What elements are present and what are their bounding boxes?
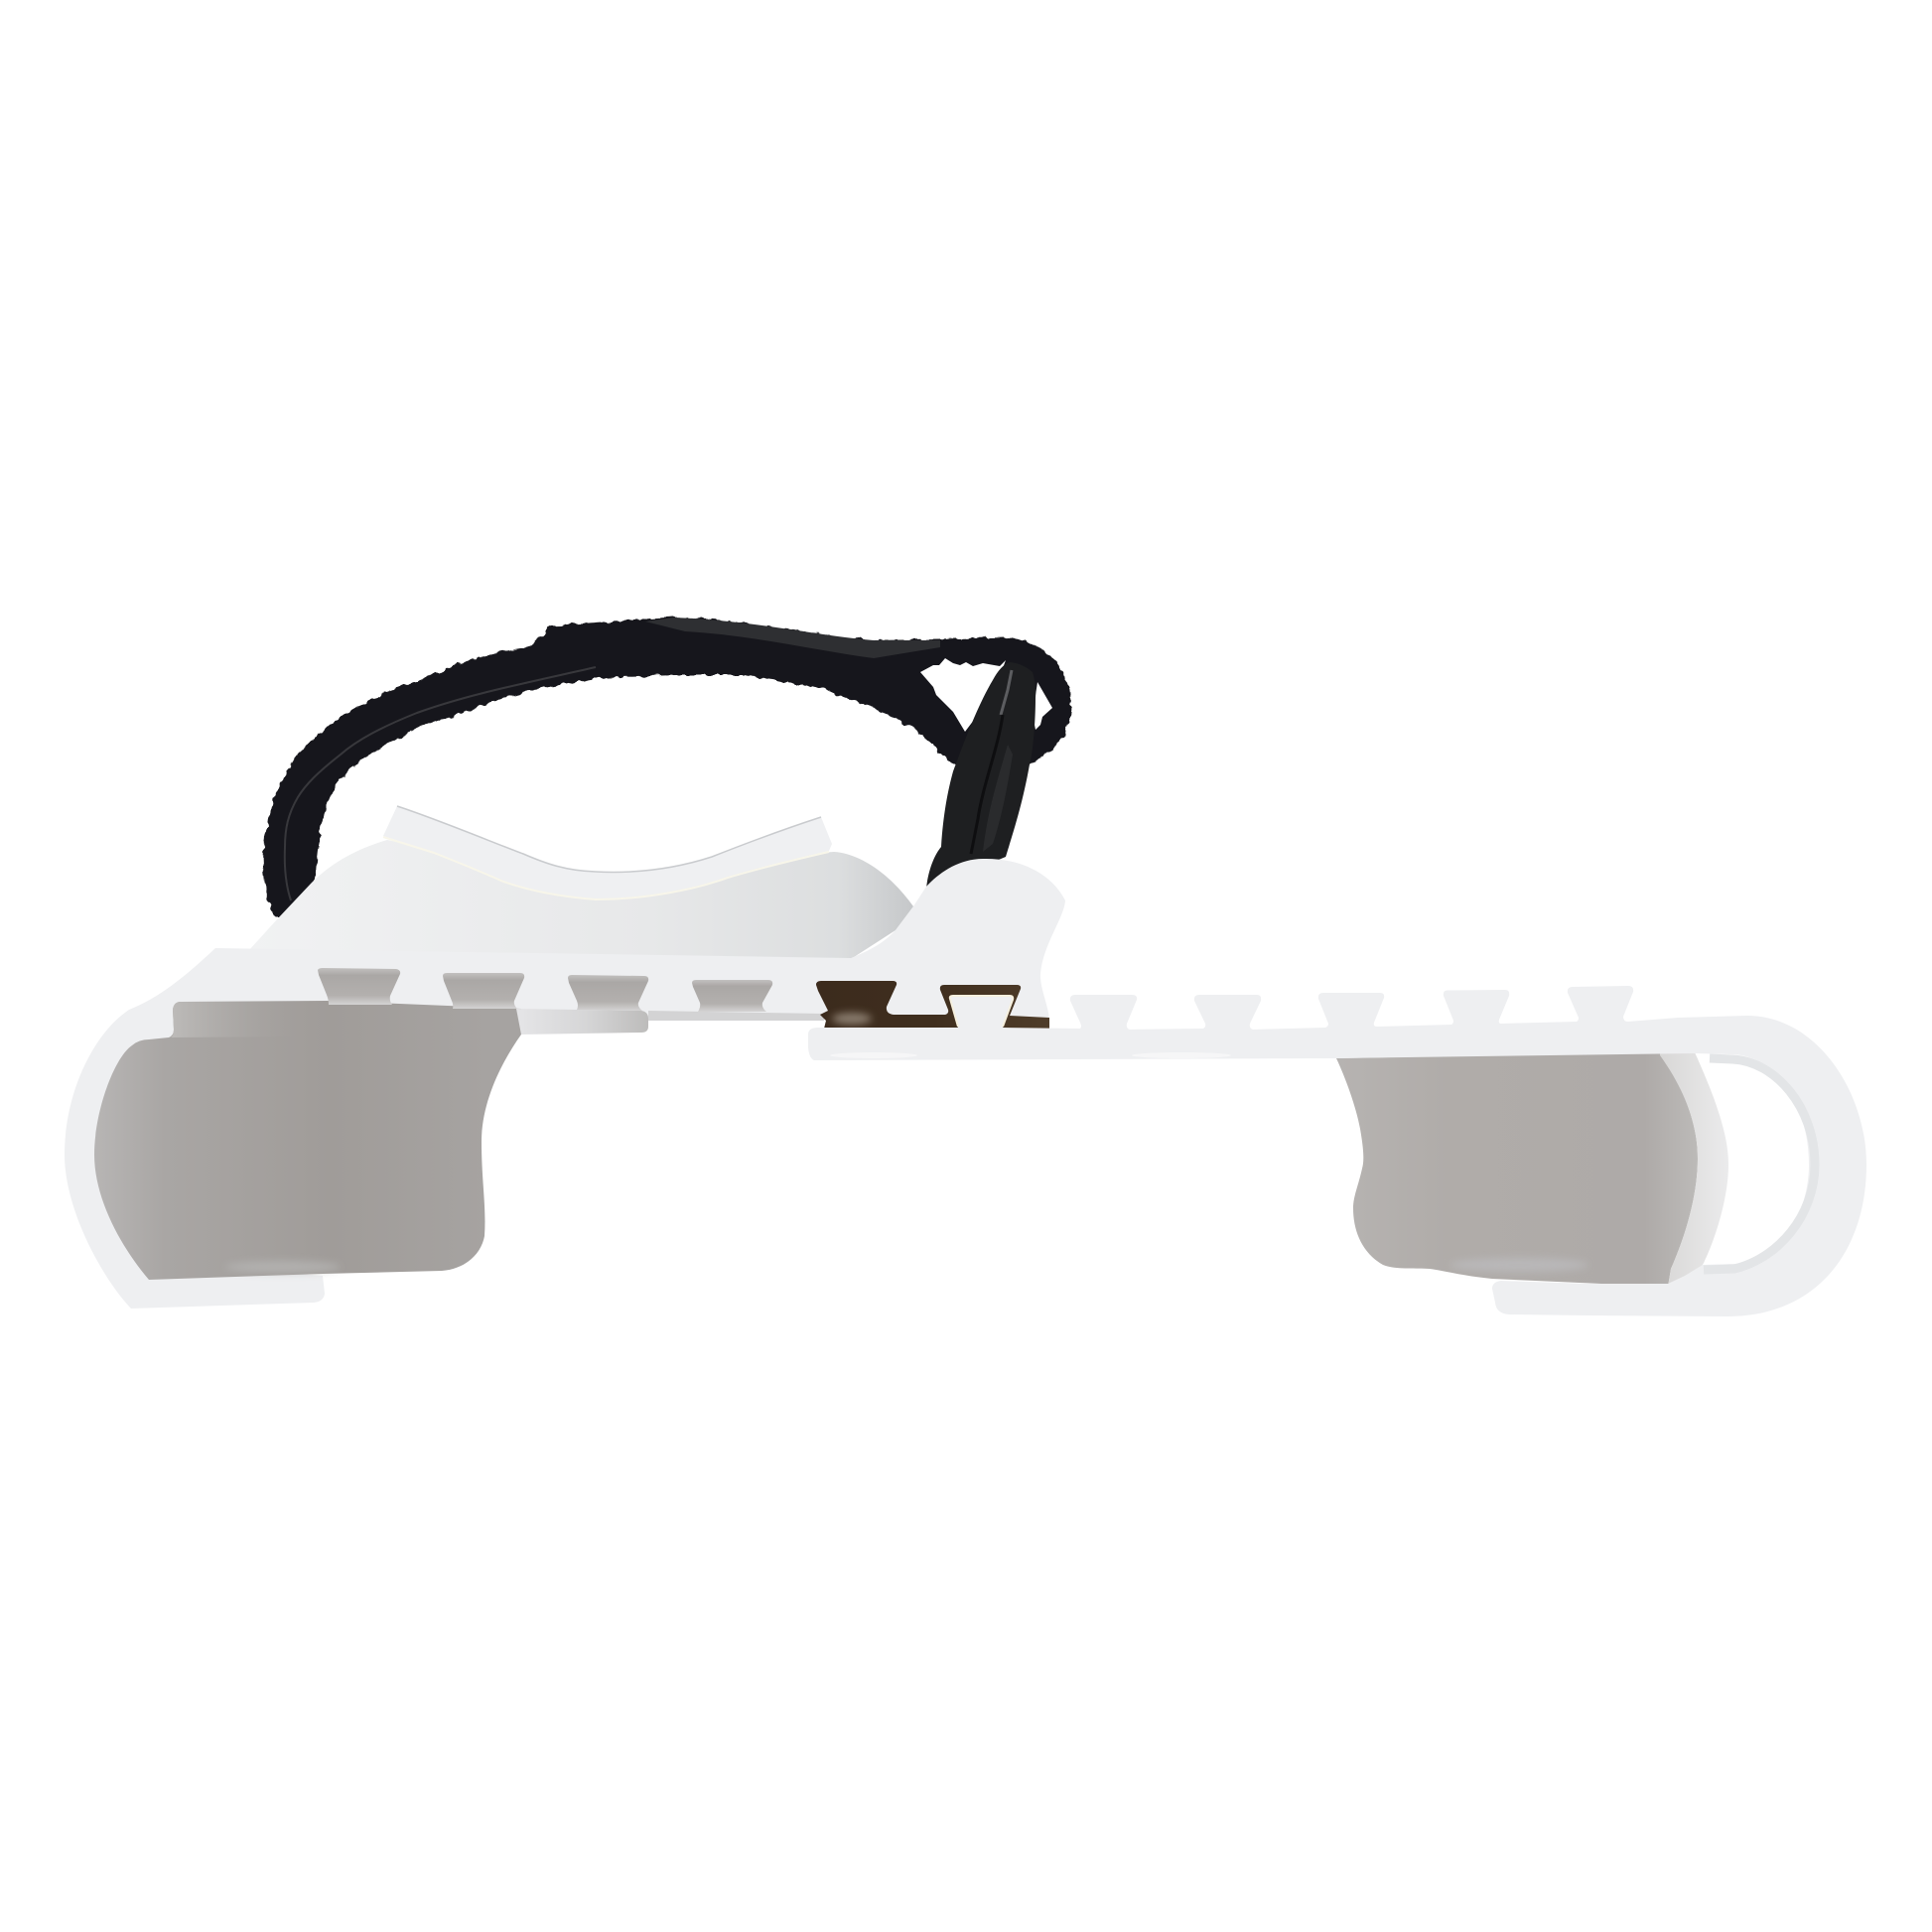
strap: gap at right of buckle (1033, 682, 1052, 730)
brown notches where plates overlap (816, 981, 1049, 1029)
strip: adhesive line (383, 837, 829, 899)
buckle: centre highlight (1001, 670, 1012, 715)
liner: lighter lower lip (225, 1261, 341, 1273)
thin band toward overlap (648, 1011, 824, 1021)
lighter lower highlight of right liner (1449, 1258, 1588, 1272)
strip: top shaded edge (397, 806, 821, 872)
notch 4 (692, 980, 772, 1012)
notch 3 (568, 975, 648, 1011)
notch 2 (443, 973, 524, 1009)
dovetail notches in upper plate (318, 968, 1049, 1029)
upper plate: left hook, top plate and shoulder (65, 859, 1065, 1309)
cushioned pad on top plate (248, 840, 913, 959)
liner: lighter upper step (171, 1002, 298, 1037)
translucent inner rim of right hook (1704, 1058, 1815, 1270)
white inner lip of right hook (1660, 1052, 1728, 1287)
black velcro strap looping over the pad (263, 618, 1071, 918)
strap: gap between strap layers (triangle) (920, 658, 1006, 732)
grey inner liner of left hook (94, 1001, 521, 1280)
lower plate with dovetail teeth and right hook (808, 986, 1866, 1316)
flexible white strip on pad (383, 806, 832, 899)
cream outline on interlocking tooth (950, 996, 1013, 1027)
dimple right (1132, 1052, 1231, 1058)
strap: seam between the two layers (285, 667, 596, 900)
strap: lighter woven top band (645, 618, 940, 658)
black buckle / slide (926, 662, 1035, 889)
light band beneath teeth of upper plate (516, 1009, 824, 1035)
underside moulding dimples on lower plate (830, 1052, 1231, 1058)
grey inner liner of right hook (1336, 1052, 1698, 1287)
buckle: centre crease (971, 715, 1003, 854)
dimple left (830, 1052, 917, 1058)
buckle: lit leather face (983, 745, 1013, 852)
lighter glare inside brown notch (832, 1013, 872, 1025)
notch 1 (318, 968, 400, 1005)
